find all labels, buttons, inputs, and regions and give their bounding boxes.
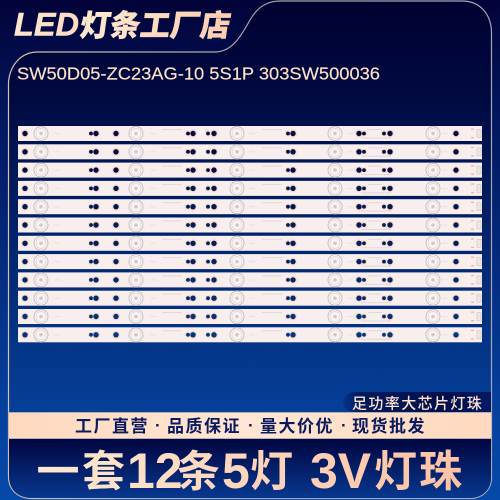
big headline: 珠 [419, 448, 462, 496]
LED strip 1 [18, 126, 482, 141]
big headline: 条 [177, 448, 220, 496]
tag: full power chip beads: 足功率大芯片灯珠 [352, 396, 483, 412]
big headline: 灯 [374, 448, 417, 496]
big headline: 套 [82, 448, 125, 496]
big headline [36, 443, 462, 499]
peach slogan band: 量大价优 [260, 417, 334, 436]
LED strip 10 [18, 291, 482, 306]
big headline: 5 [222, 443, 250, 499]
LED strip 9 [18, 272, 482, 288]
LED strip 2 [18, 144, 482, 159]
big headline: 灯 [250, 448, 293, 496]
peach slogan band: 工厂直营 [75, 416, 149, 436]
LED strip 8 [18, 254, 482, 269]
LED strip 11 [18, 309, 482, 324]
bottom navy panel [9, 439, 491, 498]
LED strip 3 [18, 162, 482, 178]
big headline: 一 [36, 448, 80, 496]
peach slogan band: · [248, 416, 255, 435]
peach slogan band: 现货批发 [352, 416, 426, 436]
big headline: 12 [127, 443, 183, 499]
LED strip 12 [18, 327, 482, 342]
LED strip 7 [18, 236, 482, 251]
peach slogan band: 品质保证 [167, 416, 241, 436]
big headline: 3V [310, 443, 372, 499]
title: 灯条工厂店 [78, 9, 233, 43]
peach slogan band: · [155, 416, 162, 435]
LED strip 5 [18, 199, 482, 214]
peach slogan band: · [341, 416, 348, 435]
model number subtitle: SW50D05-ZC23AG-10 5S1P 303SW500036 [17, 63, 380, 83]
title: LED [14, 6, 79, 42]
LED strip 4 [18, 181, 482, 196]
title [14, 6, 233, 43]
LED strips [18, 126, 482, 342]
peach slogan band [8, 412, 492, 438]
LED strip 6 [18, 217, 482, 233]
